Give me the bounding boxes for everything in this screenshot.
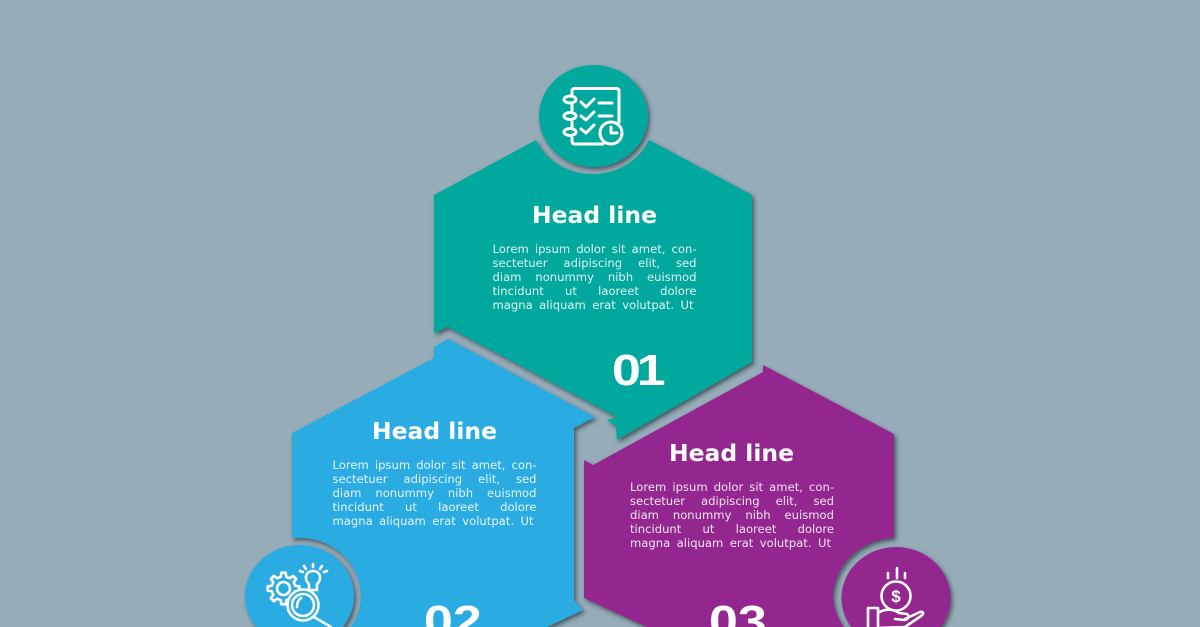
body text: [630, 480, 840, 552]
icon: coin in hand: $: [891, 587, 901, 606]
circle badge: blue: [245, 545, 354, 627]
icon: gear, magnifier and bulb: [268, 564, 331, 627]
body text: tincidunt ut laoreet dolore: [630, 522, 834, 536]
hexagon shape: purple: [584, 365, 894, 627]
hexagon shape: teal: [434, 140, 752, 440]
panel: 02 blue hexagon: [245, 339, 595, 627]
body text: magna aliquam erat volutpat. Ut: [492, 298, 694, 312]
circle badge: teal: [539, 65, 648, 167]
icon: checklist notebook with clock: [564, 88, 622, 144]
panel: 01 teal hexagon: [434, 65, 752, 440]
body text: diam nonummy nibh euismod: [630, 508, 834, 522]
body text: Lorem ipsum dolor sit amet, con-: [332, 458, 536, 472]
body text: sectetuer adipiscing elit, sed: [332, 472, 536, 486]
body text: Lorem ipsum dolor sit amet, con-: [630, 480, 834, 494]
body text: tincidunt ut laoreet dolore: [492, 284, 696, 298]
body text: Lorem ipsum dolor sit amet, con-: [492, 242, 696, 256]
number 01: 01: [612, 346, 666, 395]
circle badge: purple: [842, 547, 950, 627]
panel: 03 purple hexagon: [584, 365, 950, 627]
heading: Head line: [532, 203, 657, 229]
heading: Head line: [372, 419, 497, 445]
icon: coin in hand: [868, 568, 923, 627]
heading: Head line: [669, 441, 794, 467]
body text: sectetuer adipiscing elit, sed: [492, 256, 696, 270]
body text: [332, 458, 542, 530]
body text: diam nonummy nibh euismod: [492, 270, 696, 284]
body text: tincidunt ut laoreet dolore: [332, 500, 536, 514]
body text: diam nonummy nibh euismod: [332, 486, 536, 500]
hexagon shape: blue: [292, 339, 595, 627]
body text: magna aliquam erat volutpat. Ut: [332, 514, 534, 528]
body text: [492, 242, 702, 314]
body text: magna aliquam erat volutpat. Ut: [630, 536, 831, 550]
body text: sectetuer adipiscing elit, sed: [630, 494, 834, 508]
